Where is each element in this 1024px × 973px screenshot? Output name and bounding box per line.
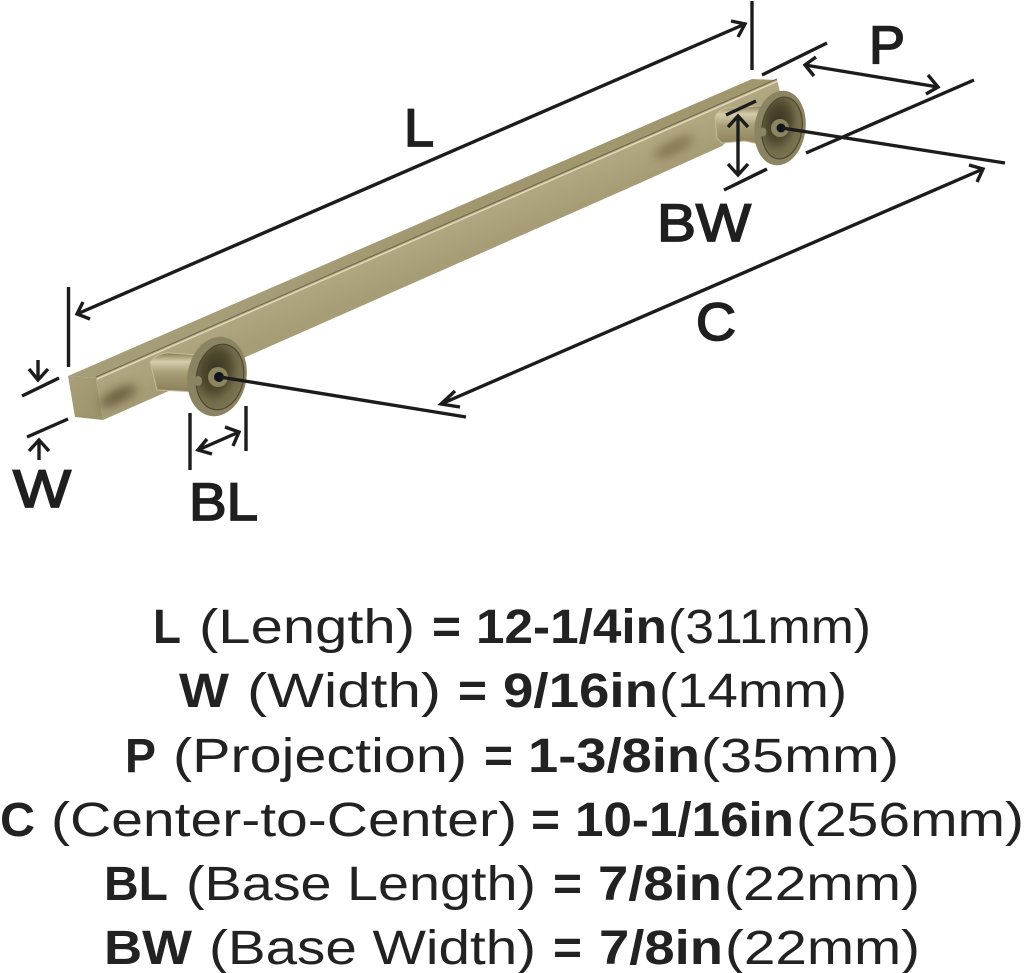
spec line: base width — [104, 922, 920, 973]
label L: L — [404, 99, 434, 158]
spec line: length: (Length) — [199, 601, 415, 654]
bar top surface — [68, 79, 777, 378]
spec line: center-to-center: (256mm) — [796, 794, 1024, 847]
spec line: base length: (Base Length) — [186, 858, 536, 911]
left post flange — [181, 332, 253, 421]
dimension L: length arrow — [68, 1, 752, 367]
left post neck — [150, 353, 196, 392]
spec line: width: W — [179, 665, 230, 718]
label BW: BW — [657, 194, 751, 253]
right post flange — [750, 87, 810, 169]
dimension C: center-to-center arrow — [220, 128, 1005, 417]
spec line: center-to-center: (Center-to-Center) — [51, 794, 517, 847]
reflection near right post — [652, 132, 696, 162]
spec line: base length: BL — [104, 858, 168, 911]
label C: C — [696, 293, 736, 352]
spec line: base length — [104, 858, 920, 911]
spec line: center-to-center: = — [531, 794, 560, 847]
spec line: projection: = — [484, 730, 513, 783]
spec line: width: = — [458, 665, 487, 718]
dimension W: width arrows — [22, 360, 68, 460]
label P: P — [869, 16, 905, 75]
reflection near left post — [97, 382, 139, 410]
spec line: width — [179, 665, 847, 718]
spec line: center-to-center — [0, 794, 1024, 847]
spec line: projection: P — [125, 730, 156, 783]
right post neck — [715, 105, 768, 146]
spec line: projection — [125, 730, 899, 783]
label W: W — [13, 460, 71, 519]
spec line: center-to-center: 10-1/16in — [575, 794, 794, 847]
bar end face — [68, 376, 103, 420]
dimension P: projection arrow — [762, 43, 974, 153]
spec line: base length: 7/8in — [598, 858, 722, 911]
spec line: length: 12-1/4in — [476, 601, 667, 654]
bar edge highlight — [96, 79, 778, 379]
spec line: projection: 1-3/8in — [528, 730, 700, 783]
bar front surface — [96, 80, 780, 420]
spec line: projection: (Projection) — [173, 730, 467, 783]
spec line: width: (14mm) — [659, 665, 847, 718]
dimension BW: base width arrow — [724, 101, 767, 190]
spec line: length: L — [153, 601, 181, 654]
spec line: width: 9/16in — [503, 665, 658, 718]
label BL: BL — [189, 473, 258, 532]
spec line: base length: = — [553, 858, 582, 911]
product: cabinet pull bar — [68, 79, 810, 421]
spec line: base length: (22mm) — [724, 858, 920, 911]
spec line: center-to-center: C — [0, 794, 35, 847]
dimension BL: base length arrow — [190, 406, 246, 470]
spec line: length — [153, 601, 871, 654]
spec line: length: (311mm) — [668, 601, 871, 654]
spec line: projection: (35mm) — [701, 730, 899, 783]
spec line: length: = — [432, 601, 461, 654]
spec line: width: (Width) — [247, 665, 441, 718]
